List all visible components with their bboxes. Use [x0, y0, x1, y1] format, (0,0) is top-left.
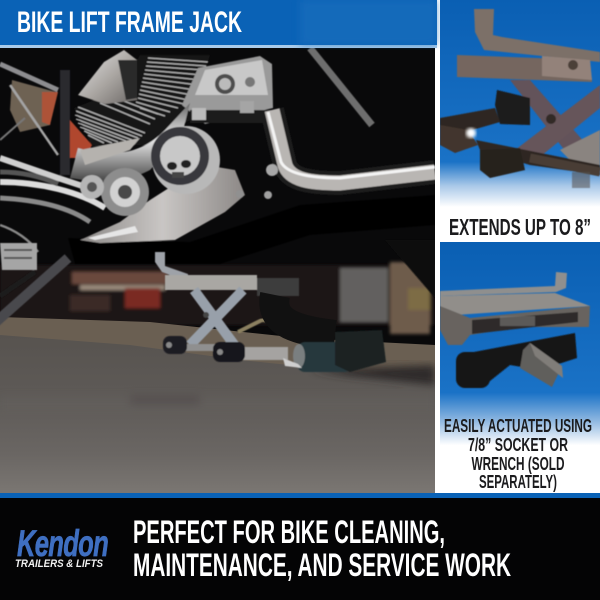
frame underside shadow	[68, 195, 435, 264]
panel: extends up to 8 inches	[440, 0, 600, 240]
sweeping chrome casing	[70, 103, 190, 182]
chrome upper cover	[182, 56, 273, 124]
footer band	[0, 493, 600, 600]
panel: socket actuation	[440, 242, 600, 493]
footboard and kickstand	[0, 243, 37, 270]
photo: jack underside	[440, 272, 590, 388]
photo: scissor jack close-up	[440, 9, 600, 188]
skull medallion	[152, 126, 220, 194]
tagline	[133, 514, 511, 583]
ornate gear cluster	[101, 168, 149, 216]
lower primary cover	[80, 165, 245, 243]
red accent behind cylinders	[70, 120, 92, 158]
logo: Kendon Trailers & Lifts	[15, 523, 108, 570]
caption	[444, 415, 592, 492]
logo: Kendon Trailers & Lifts: TRAILERS & LIFTS	[15, 558, 104, 570]
motorcycle engine	[0, 48, 435, 322]
left chrome bars	[0, 158, 110, 195]
header banner	[0, 0, 437, 48]
frame jack	[155, 252, 299, 362]
workshop background	[0, 262, 435, 334]
title: BIKE LIFT FRAME JACK	[17, 6, 242, 39]
hook tab	[154, 251, 188, 276]
main photo: motorcycle on frame jack	[0, 48, 435, 494]
rear wheel	[402, 260, 434, 297]
platform	[165, 275, 257, 290]
cooling fin cylinders	[74, 55, 210, 146]
impact wrench	[283, 330, 386, 372]
shop floor	[0, 317, 435, 380]
scissor arms	[190, 290, 243, 350]
wiring under bike	[236, 318, 266, 334]
right side exhaust pipes	[272, 110, 435, 183]
threaded rod	[185, 343, 216, 352]
bolts	[266, 164, 278, 176]
frame tubes at left	[10, 80, 56, 132]
wheels	[163, 336, 187, 354]
chrome rocker cover	[78, 50, 137, 104]
logo: Kendon Trailers & Lifts: Kendon	[17, 523, 108, 564]
